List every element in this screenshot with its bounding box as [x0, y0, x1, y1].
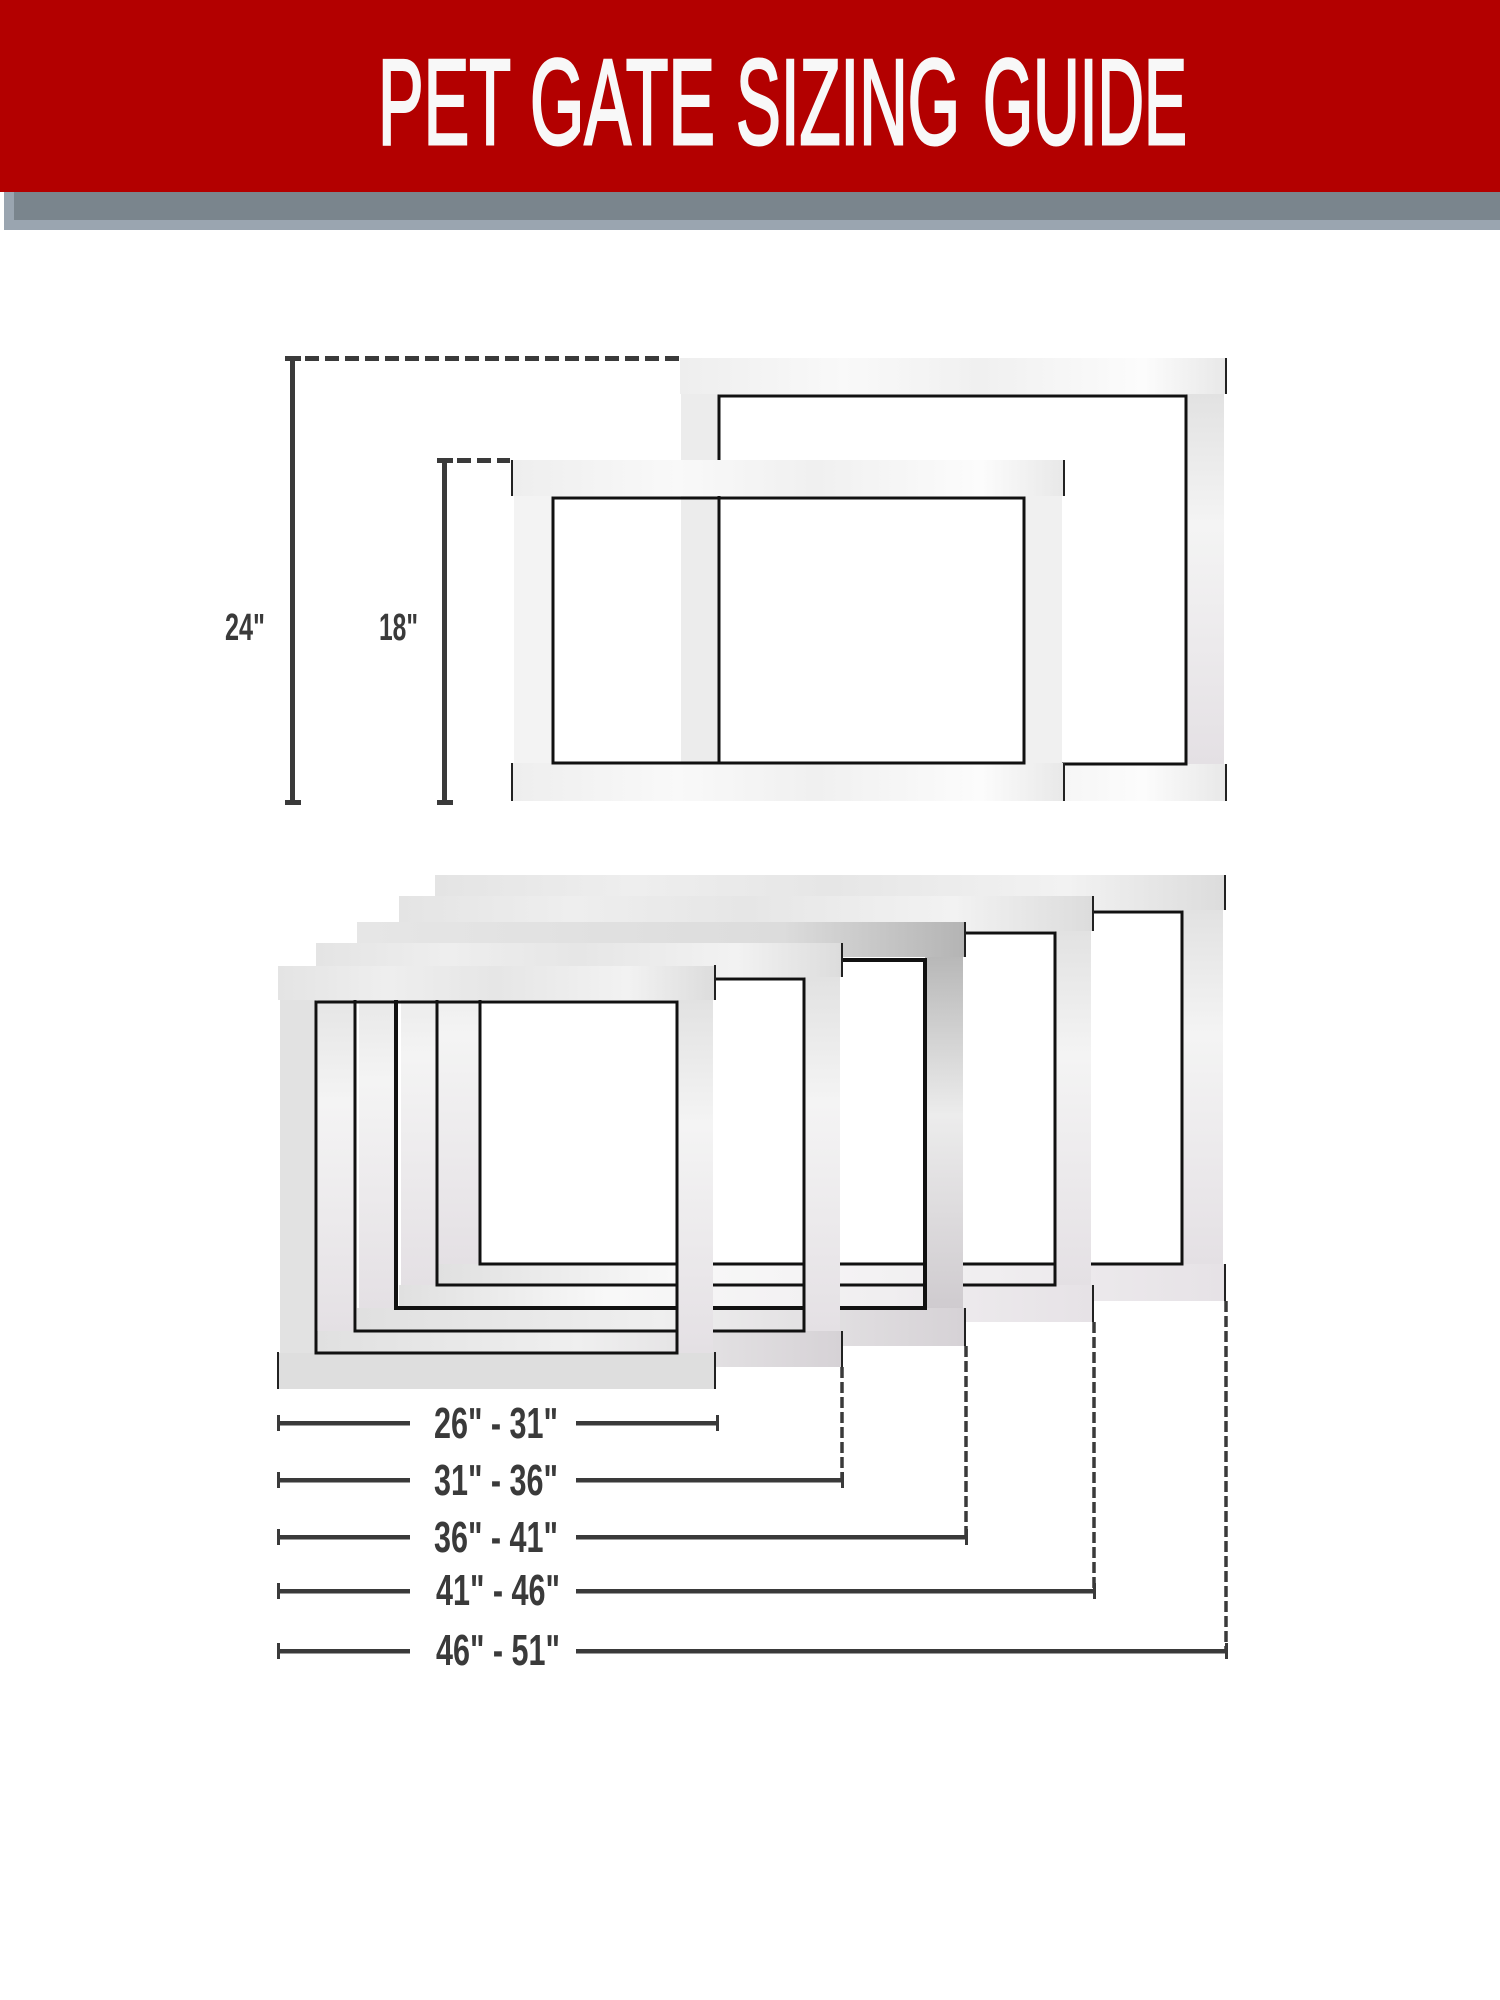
title	[378, 34, 1187, 170]
title: GATE	[530, 34, 715, 170]
measurement: 36 to 41 inches	[277, 1346, 968, 1562]
title: GUIDE	[983, 34, 1187, 170]
24 inch dimension line	[285, 356, 680, 805]
gate: 31-36 inch wide	[316, 943, 843, 1367]
width comparison diagram	[277, 875, 1228, 1675]
18 inch dimension line	[437, 458, 510, 805]
measurement: 36 to 41 inches: 36" - 41"	[434, 1513, 558, 1562]
title: SIZING	[736, 34, 960, 170]
measurement: 26 to 31 inches: 26" - 31"	[434, 1399, 558, 1448]
gate: 46-51 inch wide	[435, 875, 1226, 1301]
18 inch label: 18"	[379, 607, 418, 649]
title: PET	[378, 34, 511, 170]
gate: 41-46 inch wide	[399, 896, 1094, 1322]
gate: 26-31 inch wide	[277, 965, 716, 1389]
gate: 36-41 inch wide	[357, 922, 966, 1346]
24 inch label: 24"	[225, 607, 265, 649]
gate: 24 inch tall	[680, 358, 1227, 801]
measurement: 46 to 51 inches	[277, 1301, 1228, 1675]
measurement: 31 to 36 inches: 31" - 36"	[434, 1456, 558, 1505]
measurement: 41 to 46 inches: 41" - 46"	[436, 1566, 560, 1615]
measurement: 41 to 46 inches	[277, 1322, 1096, 1615]
measurement: 31 to 36 inches	[277, 1367, 844, 1505]
height comparison diagram	[225, 356, 1227, 805]
measurement: 46 to 51 inches: 46" - 51"	[436, 1626, 560, 1675]
header banner	[0, 0, 1500, 230]
gate: 18 inch tall	[511, 460, 1065, 801]
measurement: 26 to 31 inches	[277, 1399, 719, 1448]
